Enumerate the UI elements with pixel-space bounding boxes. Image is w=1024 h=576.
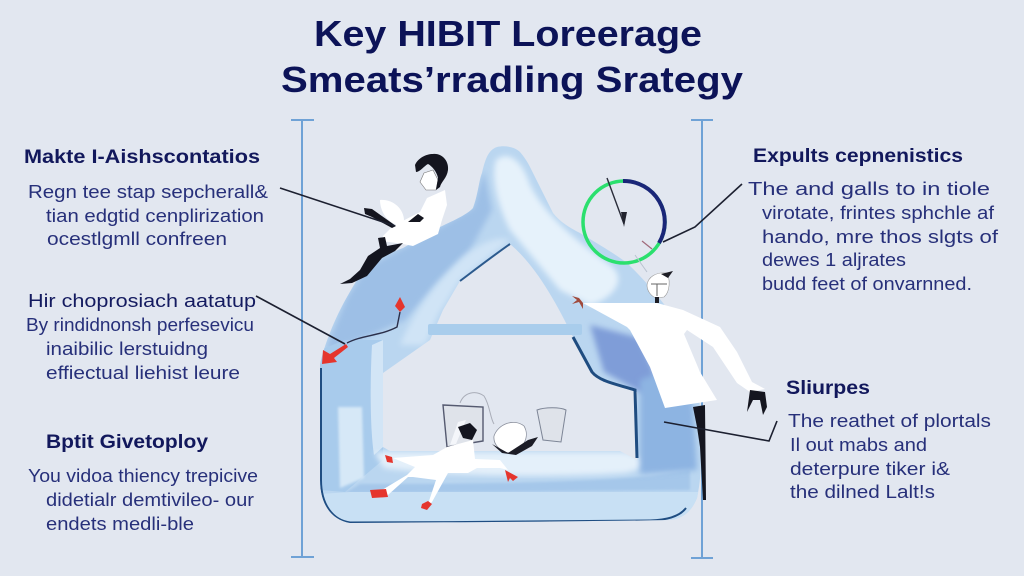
left leg highlight (338, 407, 364, 488)
title: Key HIBIT Loreerage (314, 13, 702, 54)
text block: bottom right: The reathet of plortals (788, 410, 991, 431)
icon: clock ring gauge (583, 178, 665, 272)
title: Smeats’rradling Srategy (281, 59, 743, 100)
right vertical rule (691, 120, 713, 558)
pointer hand (364, 208, 396, 228)
text block: top right: The and galls to in tiole (748, 178, 990, 199)
text block: bottom left: endets medli-ble (46, 513, 194, 534)
text block: bottom left: You vidoa thiency trepicive (28, 465, 258, 486)
figure: woman sitting on roof (340, 154, 448, 284)
figure: lying person with red shoes (370, 423, 518, 510)
text block: middle left: effiectual liehist leure (46, 362, 240, 383)
icon: red arrow on arch (322, 297, 405, 364)
title (281, 13, 743, 100)
text block: top right: virotate, frintes sphchle af (762, 202, 995, 223)
light peak (494, 156, 618, 305)
text block: top left: Makte I-Aishscontatios (24, 147, 260, 168)
text block: top left: tian edgtid cenplirization (46, 205, 264, 226)
left leg shading (320, 340, 383, 492)
black hand (747, 390, 767, 415)
text block: top right: dewes 1 aljrates (762, 249, 906, 270)
text block: bottom right: the dilned Lalt!s (790, 481, 935, 502)
floor band light (374, 452, 644, 476)
text block: top left: ocestlgmll confreen (47, 228, 227, 249)
left vertical rule (291, 120, 314, 557)
text block: top right: budd feet of onvarnned. (762, 273, 972, 294)
text block: bottom left: Bptit Givetoploy (46, 432, 208, 453)
leader lines (256, 184, 777, 441)
text block: bottom right: Il out mabs and (790, 434, 927, 455)
leg (693, 405, 706, 500)
text block: bottom right: Sliurpes (786, 378, 870, 399)
text block: middle left: Hir choprosiach aatatup (28, 290, 256, 311)
text block: bottom left (28, 432, 258, 534)
floor band darker (345, 470, 690, 493)
face (420, 170, 438, 190)
head (647, 273, 669, 298)
text block: middle left: inaibilic lerstuidng (46, 338, 208, 359)
doorway opening (383, 244, 637, 460)
text block: top right (748, 146, 999, 294)
text block: bottom left: didetialr demtivileo- our (46, 489, 254, 510)
text block: top right: hando, mre thos slgts of (762, 226, 999, 247)
deep blue beside man (588, 323, 654, 394)
doorway dark edges (460, 244, 510, 281)
text block: top right: Expults cepnenistics (753, 146, 963, 167)
neck (655, 297, 659, 303)
coat (583, 303, 765, 408)
bottom pale strip (324, 492, 698, 522)
text block: bottom right: deterpure tiker i& (790, 458, 951, 479)
illustration: ice-blue house arch (310, 140, 710, 530)
roof left shading (325, 170, 492, 350)
torso (382, 190, 447, 246)
light strip along inner roof (400, 239, 510, 345)
figure: round-head person (492, 422, 538, 455)
text block: top left (24, 147, 269, 249)
right mid blue (640, 360, 697, 474)
horizontal band (428, 324, 582, 335)
text block: top left: Regn tee stap sepcherall& (28, 181, 269, 202)
text block: bottom right (786, 378, 991, 502)
dark outer edge (321, 368, 686, 522)
legs (340, 237, 403, 284)
hair (415, 154, 448, 190)
text block: middle left: By rindidnonsh perfesevicu (26, 314, 254, 335)
figure: man in white coat (572, 271, 767, 500)
inner left highlight (371, 340, 383, 455)
coat blue slip (683, 336, 700, 392)
book (380, 200, 404, 225)
arch base (310, 140, 710, 530)
red hand (572, 296, 583, 309)
text block: middle left (26, 290, 256, 383)
figure: laptop and bucket on floor (443, 393, 566, 447)
